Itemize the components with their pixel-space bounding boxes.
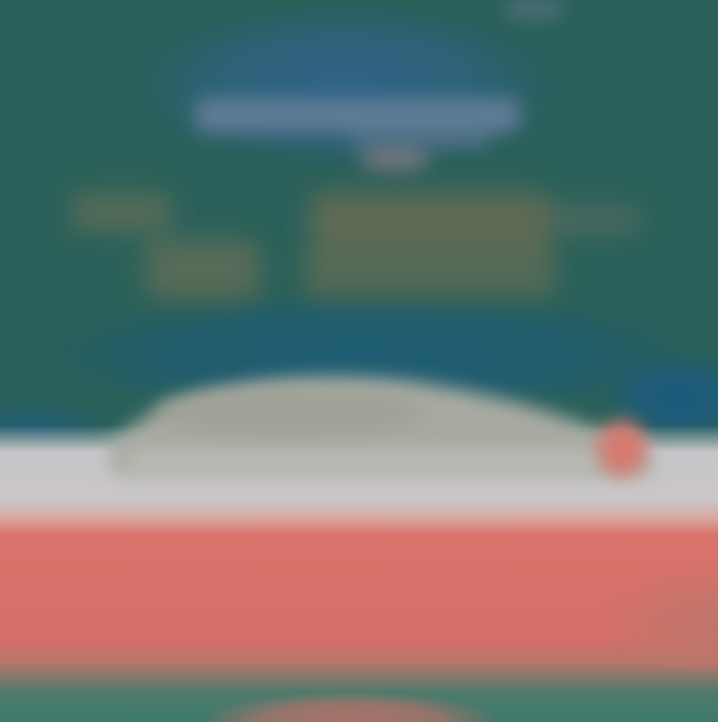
hill illustration <box>110 377 650 475</box>
background glow: lower left blue <box>0 385 170 445</box>
hill lower fade <box>130 452 600 472</box>
top right mark <box>505 0 563 18</box>
subtitle text block <box>72 192 640 298</box>
band stack: white, red and footer <box>0 425 718 722</box>
red panel right shade <box>470 540 718 670</box>
footer center <box>200 660 500 722</box>
background glow: lower right blue <box>560 350 718 445</box>
background glow: mid blue <box>30 290 710 420</box>
background glow: top blue <box>120 0 570 170</box>
hill detail <box>155 388 425 436</box>
title <box>195 98 520 171</box>
red marker <box>598 420 646 476</box>
